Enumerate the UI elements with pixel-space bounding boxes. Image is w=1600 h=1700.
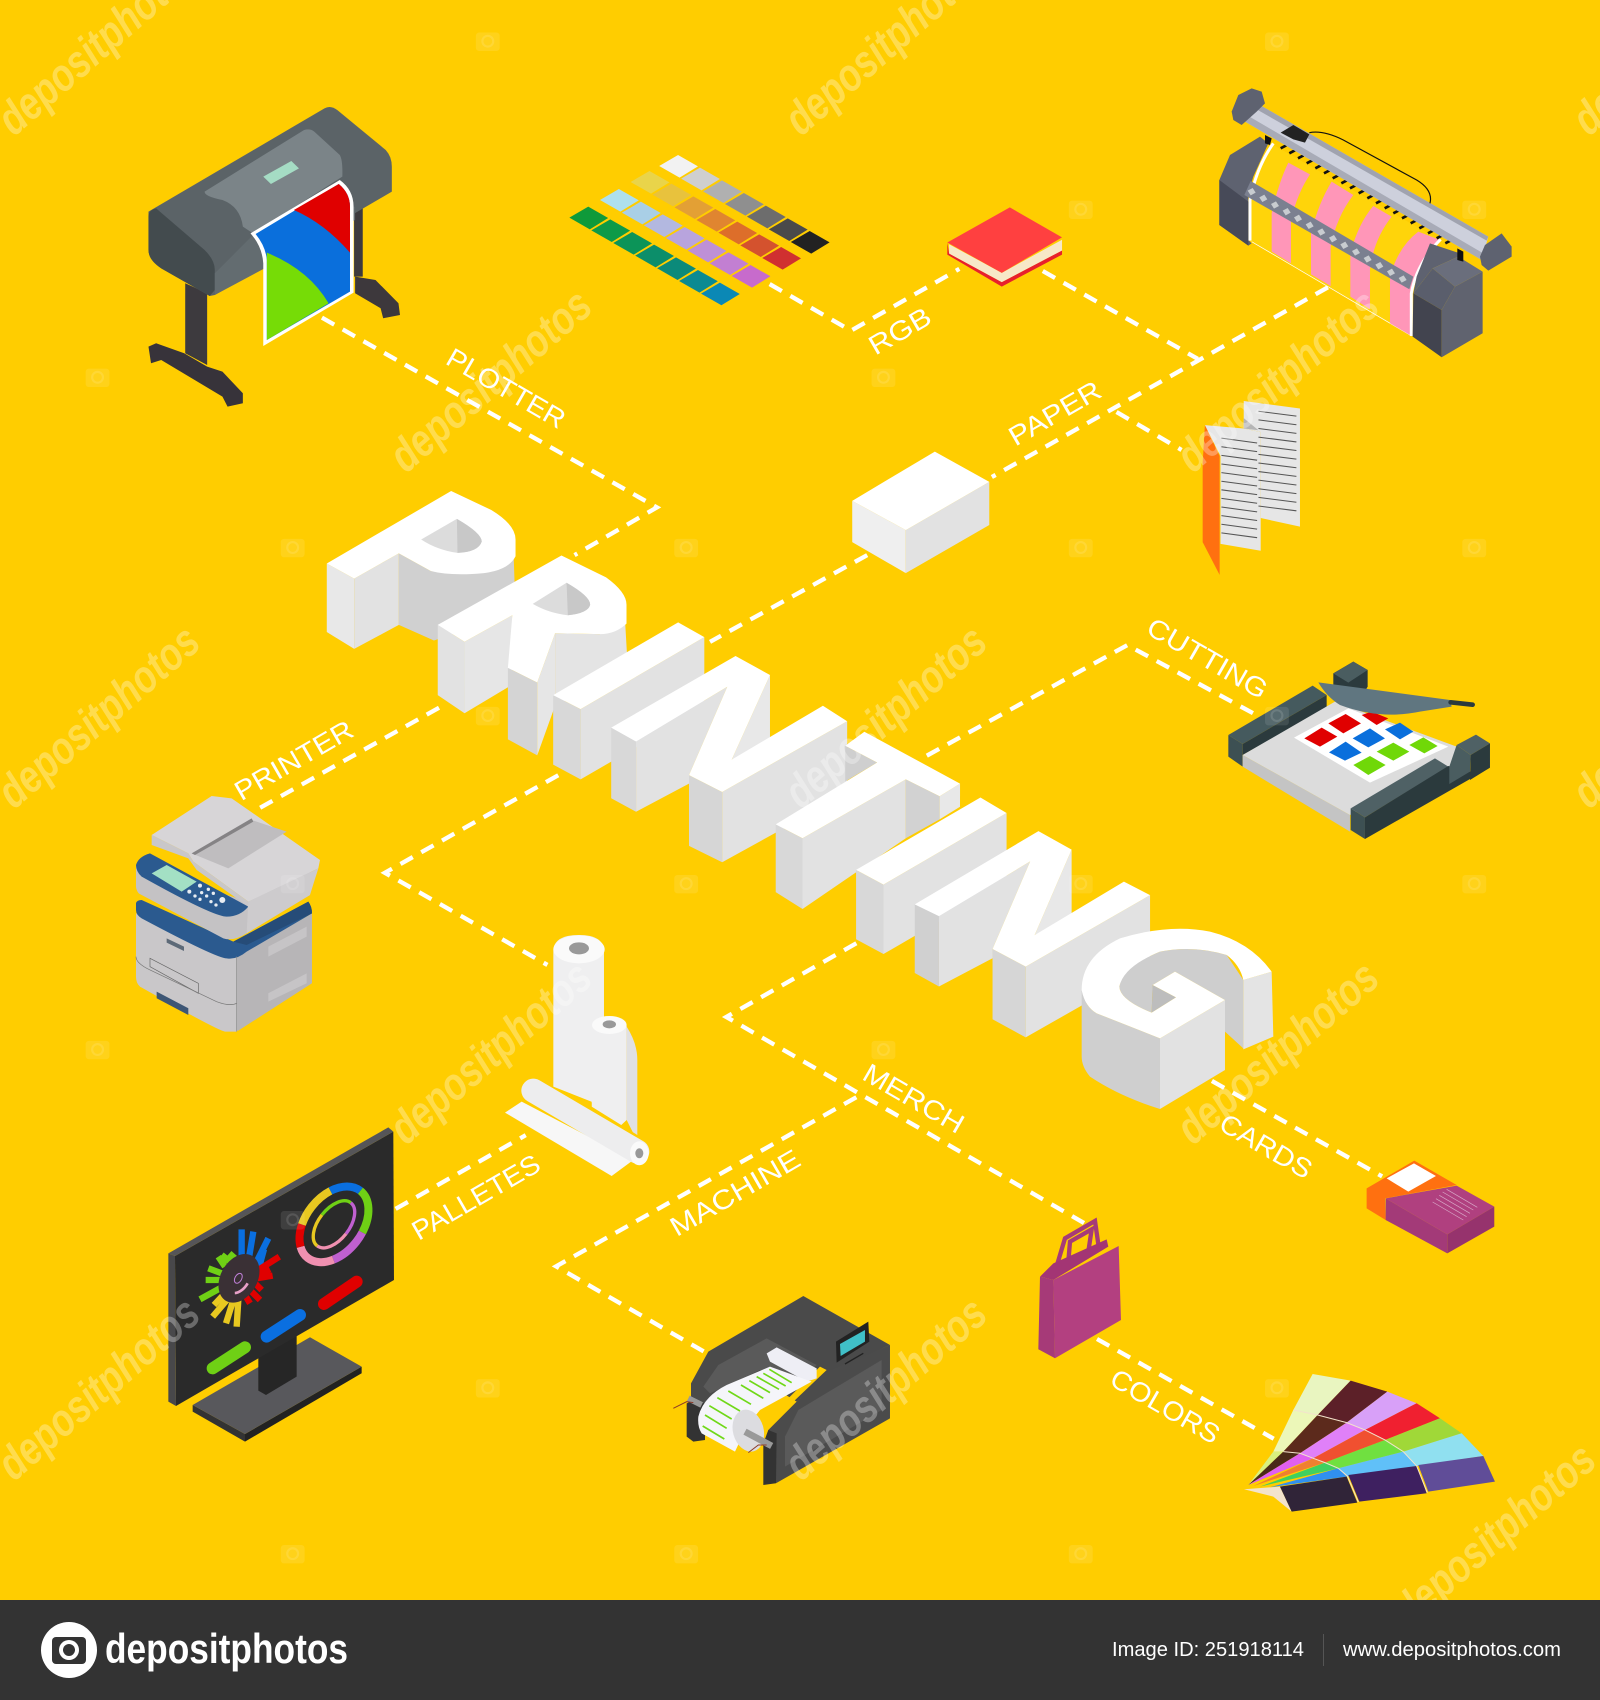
title: PRINTING 3D letters — [327, 491, 1273, 1109]
icon: multifunction printer — [136, 796, 320, 1032]
icon: label printing machine — [673, 1296, 890, 1485]
icon: large format cutter plotter — [1219, 88, 1512, 357]
letter G — [1082, 929, 1273, 1109]
icon: folded leaflet — [1203, 401, 1300, 575]
letter T — [776, 732, 960, 909]
letter I — [553, 622, 704, 779]
letter N — [611, 656, 847, 862]
watermark text: depositphotos — [379, 950, 601, 1154]
dashed connector lines — [260, 269, 1382, 1439]
icon: red book — [947, 207, 1062, 287]
connector labels: MACHINE — [664, 1143, 806, 1242]
icon: paper stack — [852, 452, 989, 573]
icon: paper rolls — [505, 935, 649, 1176]
colour pills — [213, 1282, 357, 1368]
watermark camera marks — [86, 33, 1486, 1563]
radial chart — [200, 1229, 279, 1327]
connector labels: PALLETES — [406, 1148, 546, 1246]
keypad — [187, 884, 225, 907]
ring chart — [285, 1173, 383, 1275]
connector labels: CARDS — [1214, 1107, 1318, 1185]
watermark text: depositphotos — [774, 1286, 996, 1490]
footer logo wordmark: depositphotos — [105, 1625, 348, 1672]
connector labels: PLOTTER — [441, 342, 571, 435]
letter I second — [856, 797, 1007, 954]
connector labels: PRINTER — [229, 714, 359, 807]
letter N second — [915, 831, 1150, 1037]
footer bar — [0, 1600, 1600, 1700]
icon: colour fan deck — [1244, 1374, 1495, 1512]
connector labels: PAPER — [1003, 374, 1107, 452]
watermark text: depositphotos — [1166, 950, 1388, 1154]
printed colour blocks — [1304, 712, 1438, 775]
connector labels — [229, 300, 1318, 1450]
footer logo icon — [41, 1622, 97, 1678]
icon: plotter on stand — [148, 107, 400, 407]
connector labels: RGB — [863, 300, 937, 361]
icon: shopping bag — [1038, 1221, 1121, 1358]
paper roll with green print — [698, 1367, 812, 1455]
icon: desktop monitor with colour graphics — [168, 1127, 394, 1442]
icon: guillotine paper cutter — [1228, 662, 1490, 839]
connector labels: COLORS — [1105, 1362, 1226, 1450]
icon: business card box — [1367, 1161, 1494, 1253]
icon: colour swatch rows — [569, 155, 830, 305]
watermark text: depositphotos — [379, 278, 601, 482]
printed sheet — [251, 180, 354, 346]
image id: Image ID: 251918114 — [1112, 1639, 1304, 1661]
letter R — [438, 555, 628, 755]
watermark text: depositphotos — [774, 614, 996, 818]
connector labels: MERCH — [858, 1057, 970, 1140]
connector labels: CUTTING — [1142, 611, 1274, 705]
website url: www.depositphotos.com — [1342, 1639, 1561, 1661]
watermark text: depositphotos — [1166, 278, 1388, 482]
